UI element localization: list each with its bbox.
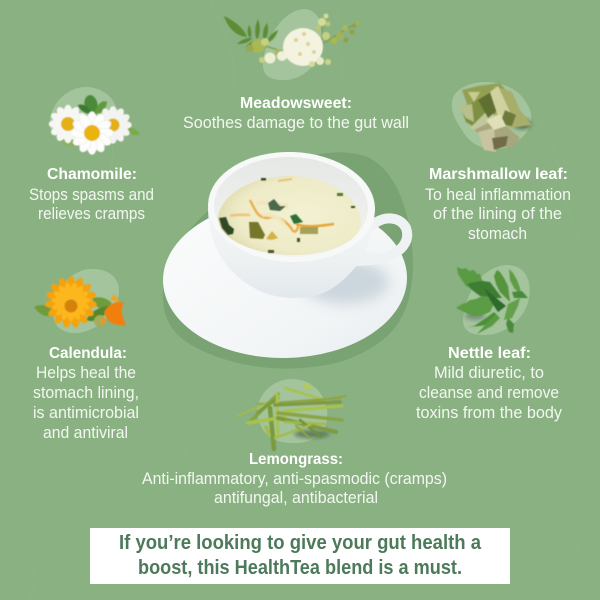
blob	[50, 87, 118, 143]
text: chamomile: Stops spasms and	[29, 186, 154, 204]
saucer	[162, 198, 408, 360]
ingredient: lemongrass	[238, 379, 346, 449]
blob	[452, 82, 531, 149]
blob	[53, 269, 119, 333]
shadow	[465, 312, 485, 320]
icon: chamomile leaves	[60, 95, 139, 147]
icon: meadowsweet leaves	[224, 16, 278, 47]
text: marshmallow leaf	[425, 166, 571, 243]
cup rim	[206, 149, 377, 265]
text: calendula: stomach lining,	[33, 384, 139, 402]
cup interior	[212, 154, 370, 260]
tea herbs	[219, 178, 355, 253]
text: chamomile: relieves cramps	[38, 205, 145, 223]
ingredient: marshmallow leaf	[452, 82, 532, 152]
text: chamomile: Chamomile:	[47, 166, 137, 183]
callout	[90, 528, 510, 584]
callout: If you’re looking to give your gut health a	[119, 532, 482, 554]
text: calendula: Calendula:	[49, 345, 127, 362]
text: nettle leaf: toxins from the body	[416, 404, 563, 422]
saucer shadow	[301, 260, 389, 304]
text: calendula: Helps heal the	[36, 364, 136, 382]
icon: calendula leaves	[34, 297, 112, 321]
icon: lemongrass blades	[238, 385, 346, 449]
text: calendula: and antiviral	[43, 424, 128, 442]
text: nettle leaf: Mild diuretic, to	[434, 364, 544, 382]
ingredient: meadowsweet	[224, 9, 360, 80]
text: nettle leaf	[416, 345, 563, 422]
ingredient: nettle leaf	[456, 265, 530, 335]
callout: boost, this HealthTea blend is a must.	[138, 557, 462, 579]
text: marshmallow leaf: stomach	[468, 225, 527, 243]
icon: calendula bud	[94, 294, 126, 327]
shadow	[513, 119, 531, 129]
text: calendula: is antimicrobial	[33, 404, 139, 422]
shadow	[294, 430, 330, 438]
text: meadowsweet	[183, 95, 409, 132]
blob	[463, 265, 530, 335]
text: marshmallow leaf: Marshmallow leaf:	[429, 166, 568, 183]
cup bowl	[208, 207, 375, 298]
blob	[257, 379, 327, 443]
text: meadowsweet: Soothes damage to the gut wall	[183, 114, 409, 132]
icon: chamomile flowers	[49, 105, 132, 155]
text: lemongrass	[142, 451, 447, 507]
tea surface	[218, 176, 361, 255]
text: calendula	[33, 345, 139, 442]
text: lemongrass: Anti-inflammatory, anti-spasmodic (cramps)	[142, 470, 447, 488]
text: marshmallow leaf: of the lining of the	[433, 205, 562, 223]
text: marshmallow leaf: To heal inflammation	[425, 186, 571, 204]
blob	[263, 9, 322, 80]
ingredient: chamomile	[49, 87, 139, 155]
cup handle	[356, 218, 407, 261]
blob behind cup	[163, 152, 413, 369]
icon: dried marshmallow leaves	[458, 83, 532, 152]
icon: nettle leaves	[456, 267, 528, 334]
text: chamomile	[29, 166, 154, 223]
text: nettle leaf: cleanse and remove	[419, 384, 559, 402]
text: lemongrass: Lemongrass:	[249, 451, 343, 468]
ingredient: calendula	[34, 269, 126, 333]
text: meadowsweet: Meadowsweet:	[240, 95, 352, 112]
text: nettle leaf: Nettle leaf:	[448, 345, 531, 362]
text: lemongrass: antifungal, antibacterial	[214, 489, 378, 507]
icon: meadowsweet blossoms	[246, 14, 360, 67]
tea cup on saucer	[162, 149, 408, 360]
icon: calendula flower	[45, 276, 97, 328]
